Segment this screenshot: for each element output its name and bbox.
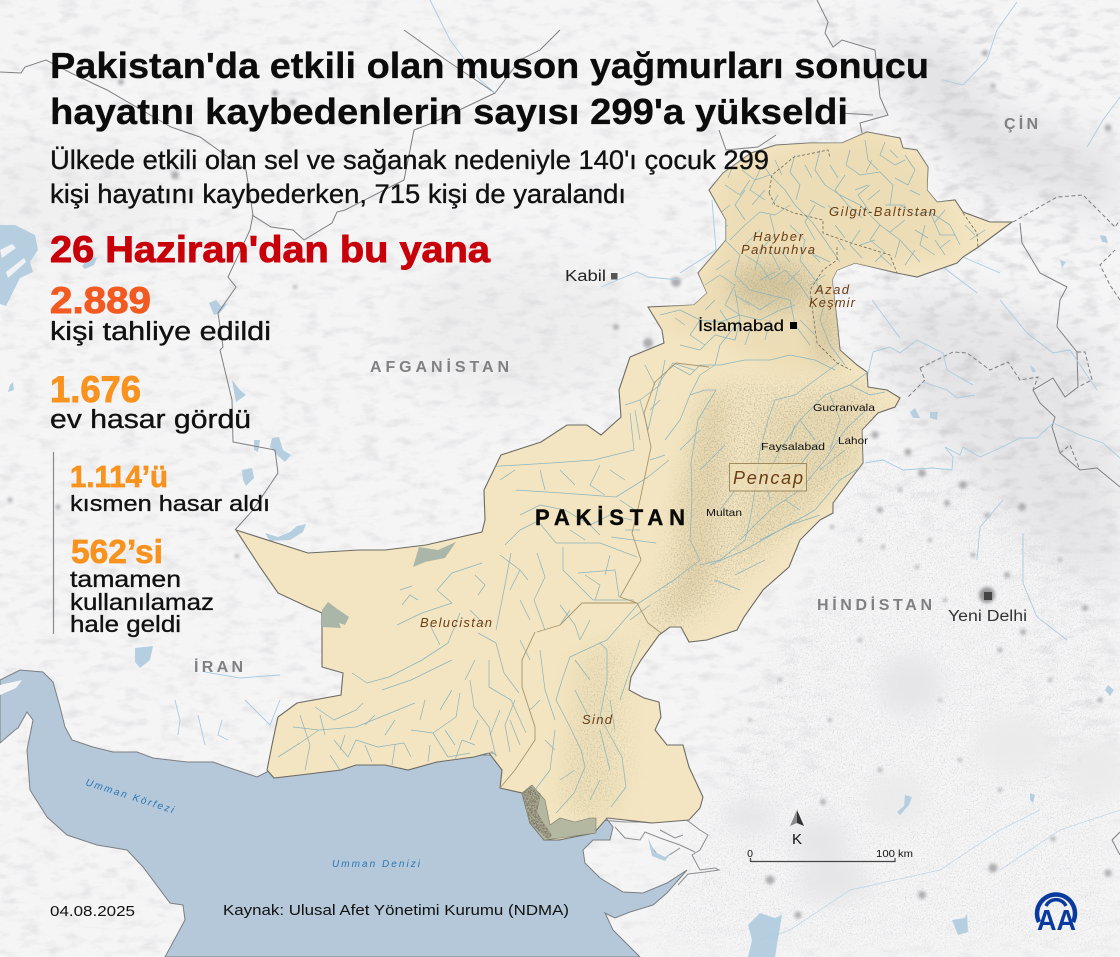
disputed borders, dashed (907, 195, 1120, 470)
lakes in Balochistan (322, 542, 498, 756)
capital: Yeni Delhi (948, 592, 1027, 625)
region labels: Pahtunhva (741, 242, 815, 257)
region labels: Azad (814, 282, 850, 297)
subtitle: kişi hayatını kaybederken, 715 kişi de yaralandı (50, 179, 626, 209)
country labels: İRAN (194, 658, 243, 676)
stat: fully damaged: kullanılamaz (70, 589, 214, 615)
country labels: ÇİN (1004, 115, 1038, 133)
capital: Kabil (565, 268, 618, 285)
stat: evacuated: 2.889 (50, 280, 151, 321)
city labels: Lahor (838, 435, 869, 447)
city labels: Gucranvala (813, 402, 875, 414)
date: 04.08.2025 (50, 904, 135, 920)
provincial borders (500, 363, 709, 788)
country labels (194, 115, 1038, 676)
stat: evacuated: kişi tahliye edildi (50, 318, 271, 346)
sea labels: Umman Denizi (332, 859, 421, 870)
sea labels: Umman Körfezi (84, 777, 176, 816)
stat: fully damaged (70, 533, 214, 637)
stat: partially damaged: kısmen hasar aldı (70, 491, 270, 516)
scale bar: 0 (747, 848, 753, 860)
capital: İslamabad: İslamabad (698, 317, 784, 335)
Rann of Kutch and coast outlines (600, 815, 719, 885)
icon: north arrow (790, 810, 804, 848)
capital: Yeni Delhi: Yeni Delhi (948, 608, 1027, 625)
stat: partially damaged (70, 459, 270, 516)
lakes (0, 225, 1114, 957)
title: hayatını kaybedenlerin sayısı 299'a yükseldi (50, 91, 848, 132)
Pakistan label: PAKİSTAN (535, 505, 685, 530)
region labels: Belucistan (420, 615, 492, 630)
icon: AA logo: AA (1037, 905, 1076, 937)
title (50, 45, 929, 132)
scale bar: km (898, 848, 913, 860)
Indus delta (522, 784, 596, 840)
stat: fully damaged: tamamen (70, 566, 181, 592)
region labels (420, 204, 936, 727)
city labels (706, 402, 875, 519)
disputed territory dashed lines (769, 150, 978, 370)
stat: fully damaged: 562’si (71, 533, 163, 570)
stat: evacuated (50, 280, 271, 346)
scale bar: 100 (876, 848, 895, 860)
rivers in Pakistan (278, 140, 985, 813)
source: Kaynak: Ulusal Afet Yönetimi Kurumu (NDMA) (223, 903, 569, 919)
sea labels (84, 777, 421, 870)
city labels: Multan (706, 507, 742, 519)
capital: Kabil: Kabil (565, 268, 606, 285)
country labels: AFGANİSTAN (370, 358, 509, 376)
shaded relief and settlement density (556, 132, 967, 828)
subtitle: Ülkede etkili olan sel ve sağanak nedeniyle 140'ı çocuk 299 (50, 145, 769, 175)
title: Pakistan'da etkili olan muson yağmurları sonucu (50, 45, 929, 86)
stat: fully damaged: hale geldi (70, 611, 181, 637)
date heading: 26 Haziran'dan bu yana (50, 229, 490, 270)
Punjab callout: Pencap (733, 468, 803, 488)
subtitle (50, 145, 769, 209)
region labels: Gilgit-Baltistan (829, 204, 936, 219)
scale bar (747, 848, 913, 862)
stat: damaged houses (50, 369, 251, 434)
country labels: HİNDİSTAN (817, 596, 932, 614)
damage breakdown (54, 452, 270, 637)
region labels: Keşmir (809, 295, 856, 310)
region labels: Sind (582, 712, 613, 727)
city labels: Faysalabad (761, 441, 825, 453)
island and Gulf detail (0, 680, 22, 695)
region labels: Hayber (753, 229, 804, 244)
Pakistan (234, 131, 1014, 840)
stat: partially damaged: 1.114’ü (70, 459, 168, 494)
icon: north arrow: K (792, 831, 802, 848)
sea: Umman Denizi and Umman Körfezi (0, 670, 687, 957)
Punjab callout (730, 464, 806, 491)
stat: damaged houses: 1.676 (50, 369, 141, 410)
capital: İslamabad (698, 317, 797, 335)
Pakistan land (236, 132, 1012, 840)
stat: damaged houses: ev hasar gördü (50, 406, 251, 434)
